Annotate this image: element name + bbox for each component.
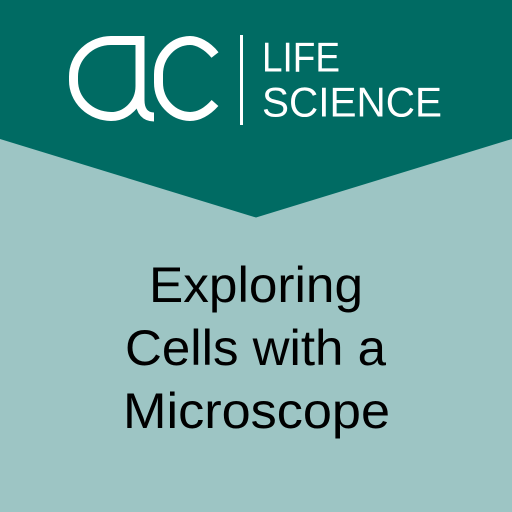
logo mark: ac	[74, 36, 215, 117]
title: Cells with a	[125, 320, 386, 376]
brand text: LIFE SCIENCE	[262, 34, 442, 126]
title: Exploring	[149, 257, 363, 313]
title	[123, 257, 390, 439]
brand text: LIFE SCIENCE: LIFE	[262, 34, 340, 80]
header chevron banner	[0, 0, 512, 218]
brand text: LIFE SCIENCE: SCIENCE	[262, 78, 442, 126]
title: Microscope	[123, 383, 390, 439]
logo divider	[240, 35, 243, 125]
